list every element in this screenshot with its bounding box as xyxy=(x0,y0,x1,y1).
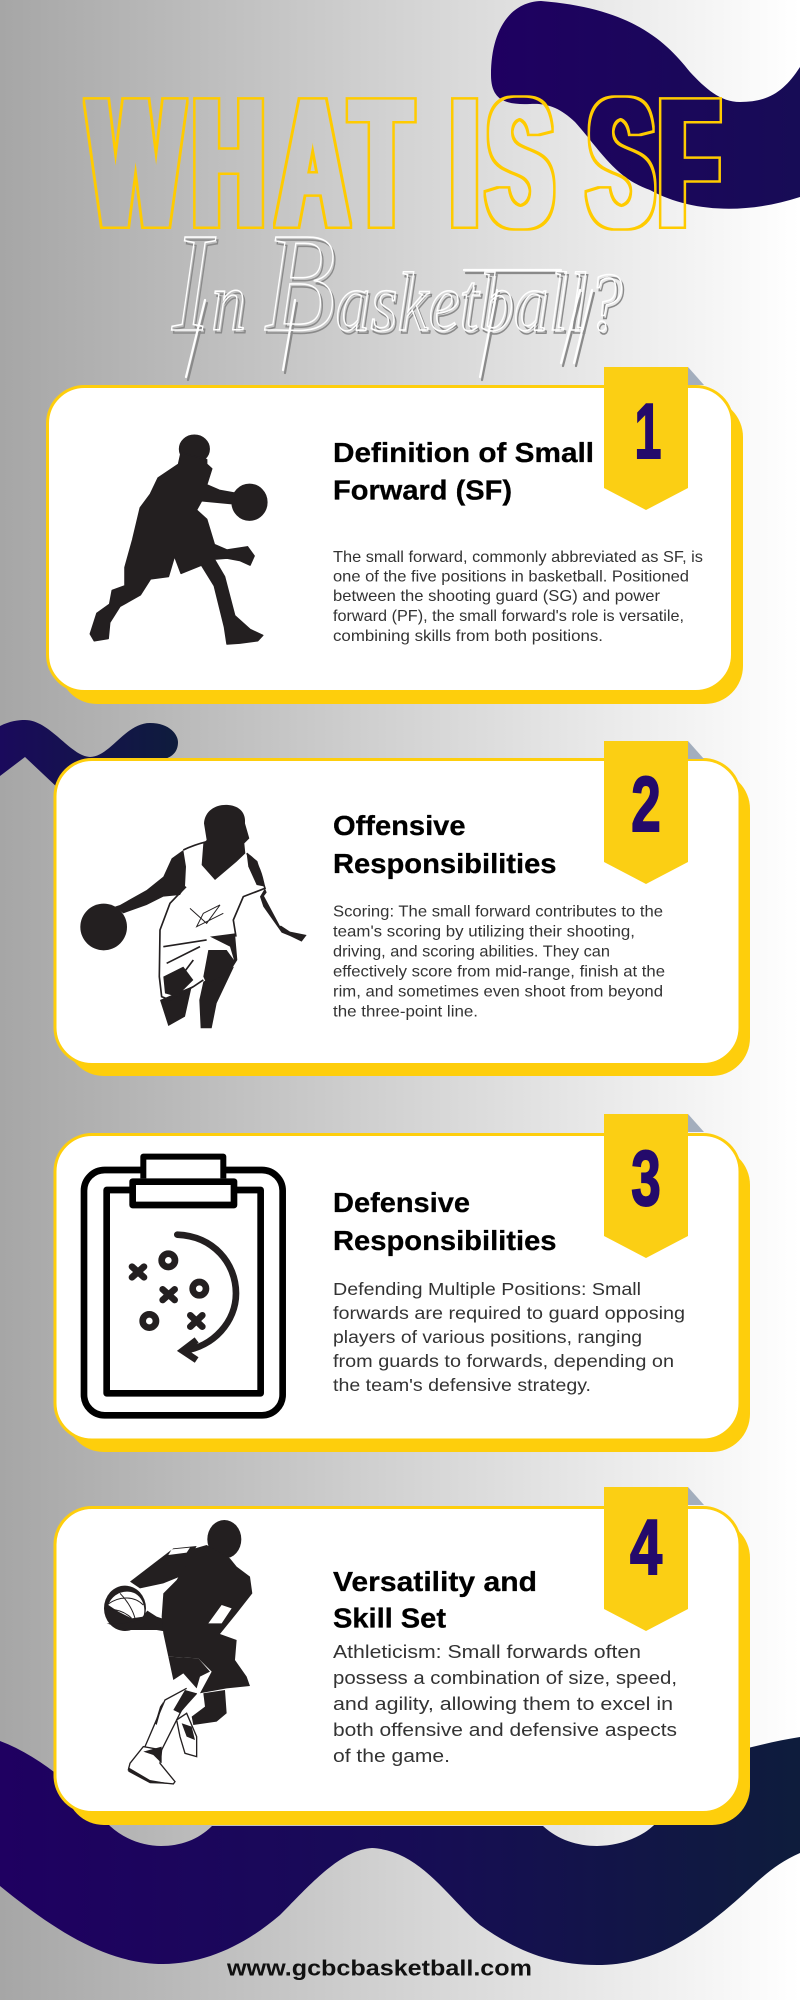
body text: effectively score from mid-range, finish at the xyxy=(333,964,665,980)
heading: Defensive xyxy=(333,1187,470,1218)
body text: the three-point line. xyxy=(333,1004,478,1020)
body text: and agility, allowing them to excel in xyxy=(333,1693,673,1714)
footer url: www.gcbcbasketball.com xyxy=(226,1956,532,1980)
decorative blob: top right xyxy=(491,1,800,209)
decorative wave: middle left xyxy=(0,720,178,790)
number ribbon 2 xyxy=(604,741,704,884)
number ribbon 3: 3 xyxy=(631,1136,661,1223)
icon: dribbling silhouette xyxy=(90,435,267,644)
heading: Responsibilities xyxy=(333,848,556,879)
heading: Definition of Small xyxy=(333,437,594,468)
panel 1: definition xyxy=(48,367,743,704)
body text: rim, and sometimes even shoot from beyond xyxy=(333,984,663,1000)
heading xyxy=(333,810,556,879)
title: WHAT IS SF: WHAT IS SF xyxy=(89,62,719,266)
panel 3: defensive responsibilities xyxy=(55,1114,750,1452)
number ribbon 3 xyxy=(604,1114,704,1258)
body text: The small forward, commonly abbreviated as SF, is xyxy=(333,549,703,566)
heading: Skill Set xyxy=(333,1602,446,1634)
heading xyxy=(333,437,594,506)
body text xyxy=(333,549,703,645)
panel 4: versatility and skill set xyxy=(55,1487,750,1825)
heading xyxy=(333,1566,537,1634)
body text: Scoring: The small forward contributes to the xyxy=(333,904,663,920)
body text: Athleticism: Small forwards often xyxy=(333,1641,641,1662)
heading: Versatility and xyxy=(333,1566,537,1597)
icon: clipboard play diagram xyxy=(84,1157,283,1415)
number ribbon 1: 1 xyxy=(635,387,661,475)
heading: Offensive xyxy=(333,810,466,841)
body text: of the game. xyxy=(333,1745,450,1766)
body text: team's scoring by utilizing their shooting, xyxy=(333,924,635,940)
number ribbon 4 xyxy=(604,1487,704,1631)
panel 2: offensive responsibilities xyxy=(55,741,750,1076)
body text: possess a combination of size, speed, xyxy=(333,1667,677,1688)
icon: driving player xyxy=(104,1520,252,1784)
body text xyxy=(333,1279,685,1395)
body text xyxy=(333,1641,677,1766)
body text: Defending Multiple Positions: Small xyxy=(333,1279,641,1299)
body text: driving, and scoring abilities. They can xyxy=(333,944,610,960)
body text: players of various positions, ranging xyxy=(333,1327,642,1347)
decorative wave: bottom xyxy=(0,1737,800,1965)
heading xyxy=(333,1187,556,1256)
body text: between the shooting guard (SG) and power xyxy=(333,588,660,605)
body text: one of the five positions in basketball. Positioned xyxy=(333,568,689,586)
body text: forwards are required to guard opposing xyxy=(333,1303,685,1323)
subtitle: In Basketball?: In Basketball? xyxy=(171,205,622,362)
number ribbon 4: 4 xyxy=(630,1504,662,1591)
body text: combining skills from both positions. xyxy=(333,628,603,645)
body text: from guards to forwards, depending on xyxy=(333,1351,674,1371)
number ribbon 1 xyxy=(604,367,704,510)
body text xyxy=(333,904,665,1020)
heading: Responsibilities xyxy=(333,1225,556,1256)
number ribbon 2: 2 xyxy=(631,762,661,849)
body text: the team's defensive strategy. xyxy=(333,1375,591,1395)
icon: dribbling player with jersey xyxy=(80,805,307,1028)
body text: both offensive and defensive aspects xyxy=(333,1719,677,1740)
heading: Forward (SF) xyxy=(333,474,512,506)
body text: forward (PF), the small forward's role is versatile, xyxy=(333,608,684,625)
